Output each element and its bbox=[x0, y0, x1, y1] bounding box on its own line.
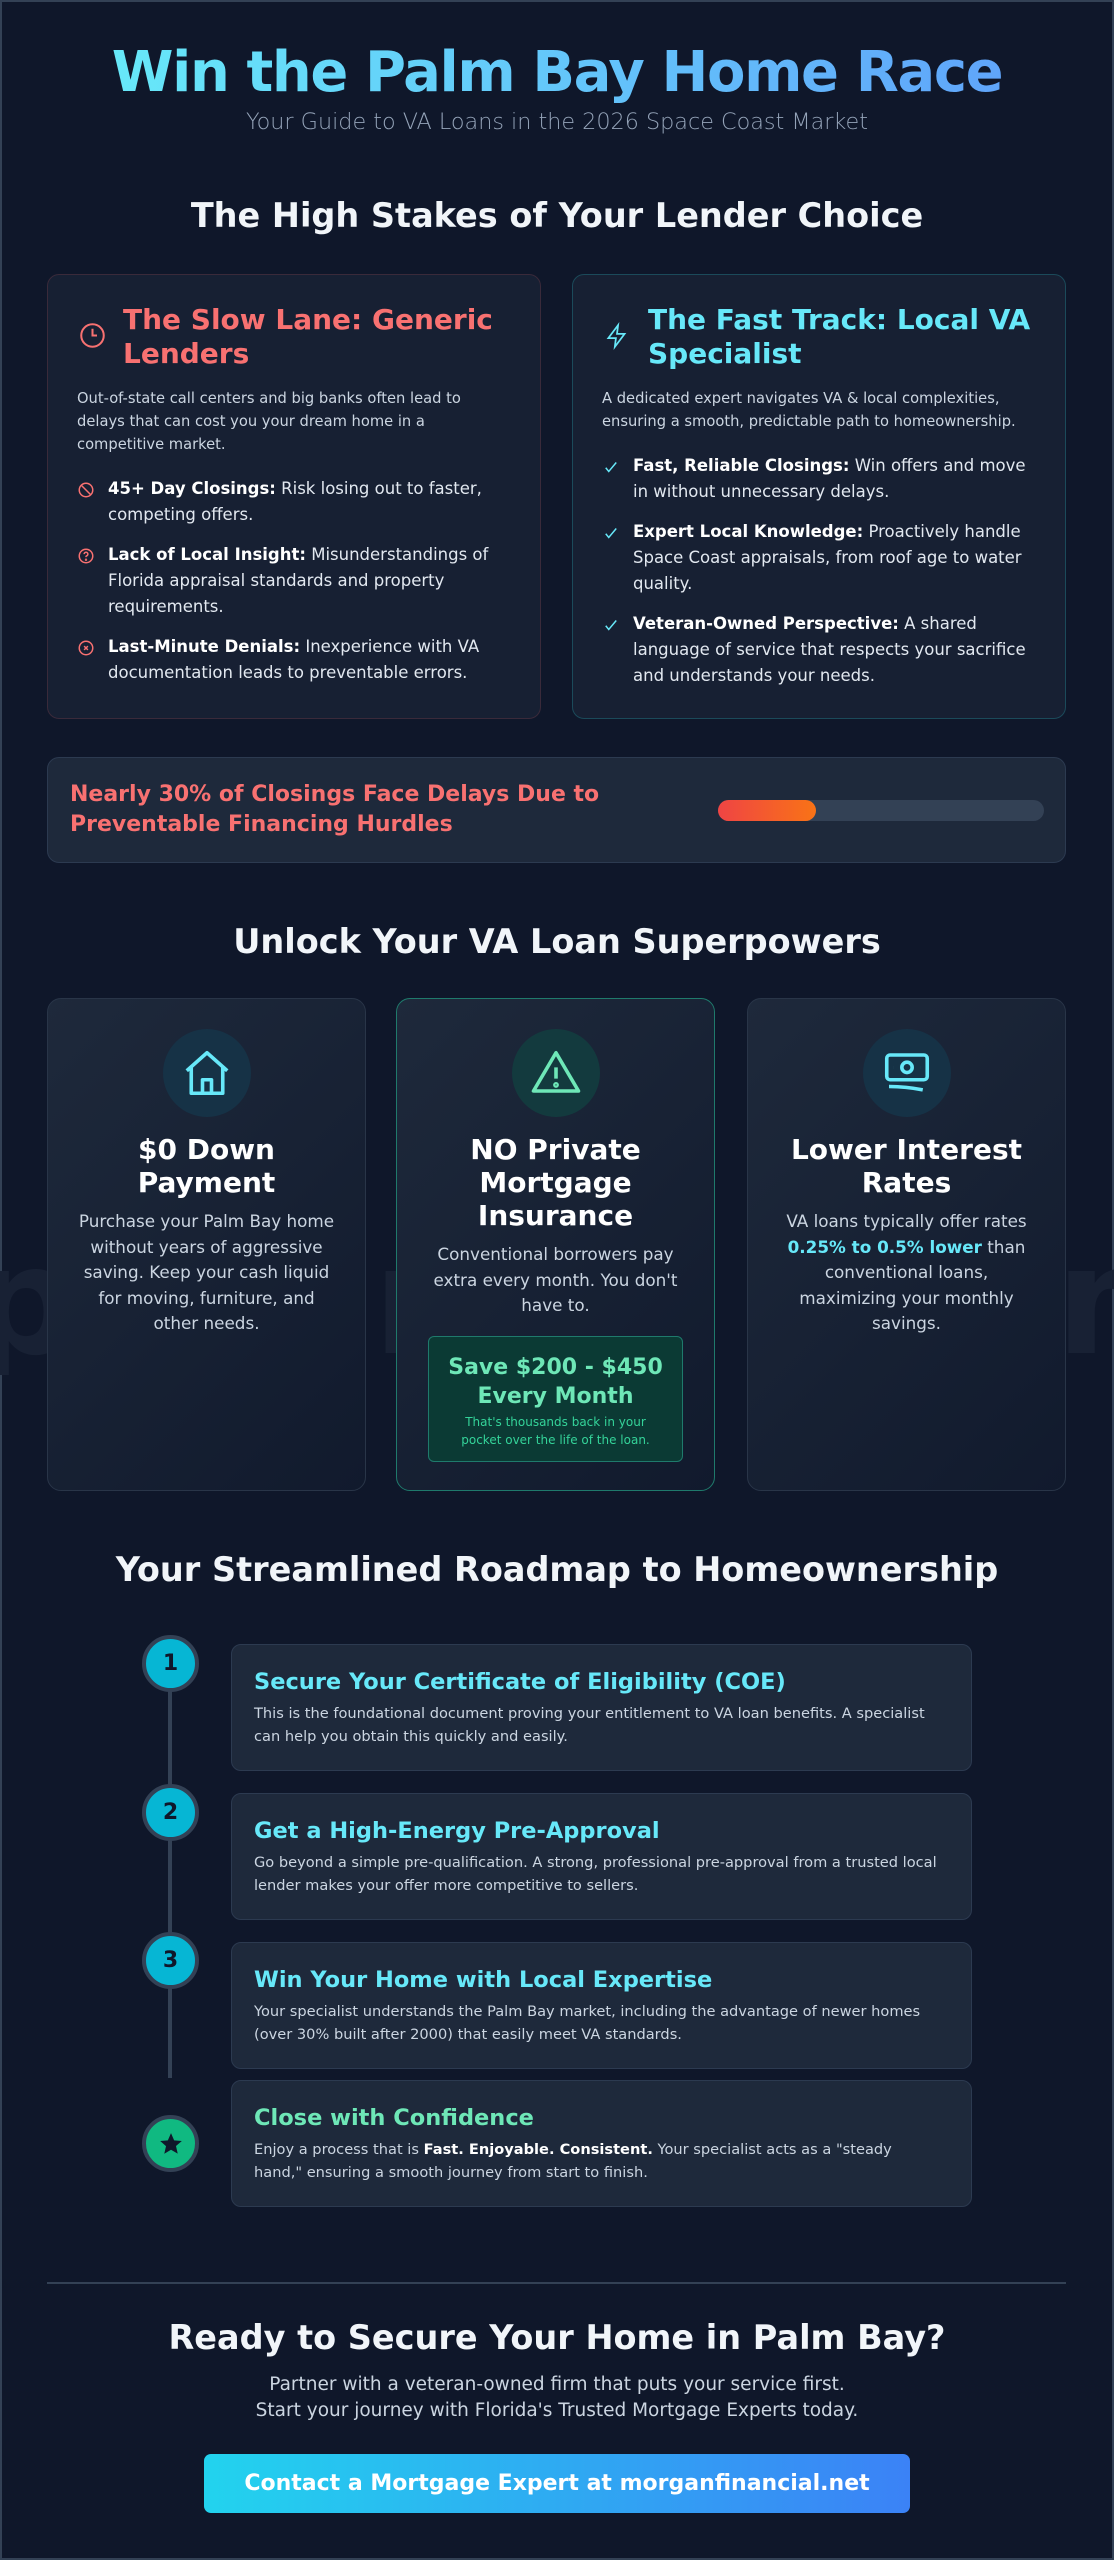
step 3: 3 bbox=[163, 1948, 178, 1973]
text: Win Your Home with Local Expertise bbox=[254, 1967, 712, 1993]
bullet list: slow lane bbox=[78, 479, 489, 682]
stat text: Nearly 30% of Closings Face Delays Due to bbox=[70, 782, 599, 807]
icon: clock bbox=[80, 323, 105, 348]
stat text bbox=[70, 782, 599, 837]
card: zero down: Purchase your Palm Bay home without years of aggressive saving. Keep your cash liquid for moving, furniture, and other needs. bbox=[79, 1211, 334, 1333]
bullet list: fast track: Expert Local Knowledge: Proactively handle Space Coast appraisals, from roof age to water quality. bbox=[633, 522, 1022, 593]
panel: slow lane bbox=[47, 274, 541, 719]
heading: roadmap: Your Streamlined Roadmap to Homeownership bbox=[116, 1550, 998, 1589]
CTA text: Partner with a veteran-owned firm that puts your service first. bbox=[269, 2374, 845, 2395]
step 2 bbox=[142, 1784, 199, 1841]
bullet list: slow lane: Lack of Local Insight: Misunderstandings of Florida appraisal standards and property requirements. bbox=[108, 545, 488, 616]
card: lower rates bbox=[747, 998, 1066, 1491]
panel: fast track bbox=[572, 274, 1066, 719]
icon: money bbox=[862, 1029, 950, 1117]
bullet list: slow lane: 45+ Day Closings: Risk losing out to faster, competing offers. bbox=[108, 479, 482, 524]
heading: CTA: Ready to Secure Your Home in Palm Bay? bbox=[168, 2318, 946, 2357]
card: no PMI bbox=[396, 998, 715, 1491]
card: lower rates: VA loans typically offer rates 0.25% to 0.5% lower than conventional loans, maximizing your monthly savings. bbox=[786, 1211, 1027, 1333]
callout: savings: That's thousands back in your bbox=[465, 1414, 646, 1428]
text: Close with Confidence bbox=[254, 2105, 534, 2131]
timeline line bbox=[168, 1663, 172, 2078]
icon: warning bbox=[512, 1029, 600, 1117]
title: Win the Palm Bay Home Race bbox=[112, 40, 1002, 105]
step 1: 1 bbox=[163, 1651, 178, 1676]
text: slow lane intro: Out-of-state call centers and big banks often lead to delays that can cost you your dream home in a competitive market. bbox=[77, 390, 461, 453]
progress bar bbox=[718, 800, 1044, 821]
text: Enjoy a process that is Fast. Enjoyable. Consistent. Your specialist acts as a "steady hand," ensuring a smooth journey from start to finish. bbox=[254, 2141, 892, 2181]
bullet list: slow lane: Last-Minute Denials: Inexperience with VA documentation leads to preventable errors. bbox=[108, 637, 479, 682]
text: This is the foundational document proving your entitlement to VA loan benefits. A specialist can help you obtain this quickly and easily. bbox=[254, 1705, 925, 1745]
callout: savings bbox=[428, 1336, 683, 1462]
text: Go beyond a simple pre-qualification. A strong, professional pre-approval from a trusted local lender makes your offer more competitive to sellers. bbox=[254, 1854, 937, 1894]
subtitle: Your Guide to VA Loans in the 2026 Space Coast Market bbox=[246, 109, 868, 135]
bullet list: fast track bbox=[605, 456, 1026, 685]
bullet list: fast track: Veteran-Owned Perspective: A shared language of service that respects your sacrifice and understands your needs. bbox=[633, 614, 1026, 685]
text: Get a High-Energy Pre-Approval bbox=[254, 1818, 660, 1844]
card: zero down: $0 Down Payment bbox=[138, 1133, 275, 1199]
step 2: 2 bbox=[163, 1800, 178, 1825]
text: fast track intro: A dedicated expert navigates VA & local complexities, ensuring a smooth, predictable path to homeownership. bbox=[602, 390, 1016, 430]
bullet list: fast track: Fast, Reliable Closings: Win offers and move in without unnecessary delays. bbox=[633, 456, 1026, 501]
stat callout: closing delays bbox=[47, 757, 1066, 863]
card: no PMI: Conventional borrowers pay extra every month. You don't have to. bbox=[434, 1244, 677, 1315]
step 3 bbox=[142, 1932, 199, 1989]
callout: savings: Save $200 - $450 bbox=[448, 1354, 663, 1380]
CTA text: Start your journey with Florida's Trusted Mortgage Experts today. bbox=[256, 2400, 858, 2421]
text: Secure Your Certificate of Eligibility (COE) bbox=[254, 1669, 786, 1695]
card: lower rates: Lower Interest Rates bbox=[791, 1133, 1022, 1199]
CTA button bbox=[204, 2454, 910, 2513]
icon: lightning bbox=[606, 322, 626, 350]
card: no PMI: NO Private Mortgage Insurance bbox=[470, 1133, 641, 1232]
callout: savings: pocket over the life of the loan. bbox=[461, 1432, 650, 1446]
icon: house bbox=[162, 1029, 250, 1117]
heading: high stakes: The High Stakes of Your Lender Choice bbox=[191, 196, 923, 235]
heading: slow lane: The Slow Lane: Generic Lenders bbox=[123, 303, 493, 370]
step 4: star bbox=[142, 2115, 199, 2172]
CTA button: Contact a Mortgage Expert at morganfinancial.net bbox=[244, 2471, 870, 2496]
text: Your specialist understands the Palm Bay market, including the advantage of newer homes (over 30% built after 2000) that easily meet VA standards. bbox=[254, 2003, 920, 2043]
step 1 bbox=[142, 1635, 199, 1692]
stat text: Preventable Financing Hurdles bbox=[70, 812, 453, 837]
heading: fast track: The Fast Track: Local VA Specialist bbox=[648, 303, 1030, 370]
card: zero down bbox=[47, 998, 366, 1491]
CTA text bbox=[256, 2374, 858, 2421]
callout: savings: Every Month bbox=[478, 1384, 634, 1408]
heading: superpowers: Unlock Your VA Loan Superpowers bbox=[233, 922, 881, 961]
